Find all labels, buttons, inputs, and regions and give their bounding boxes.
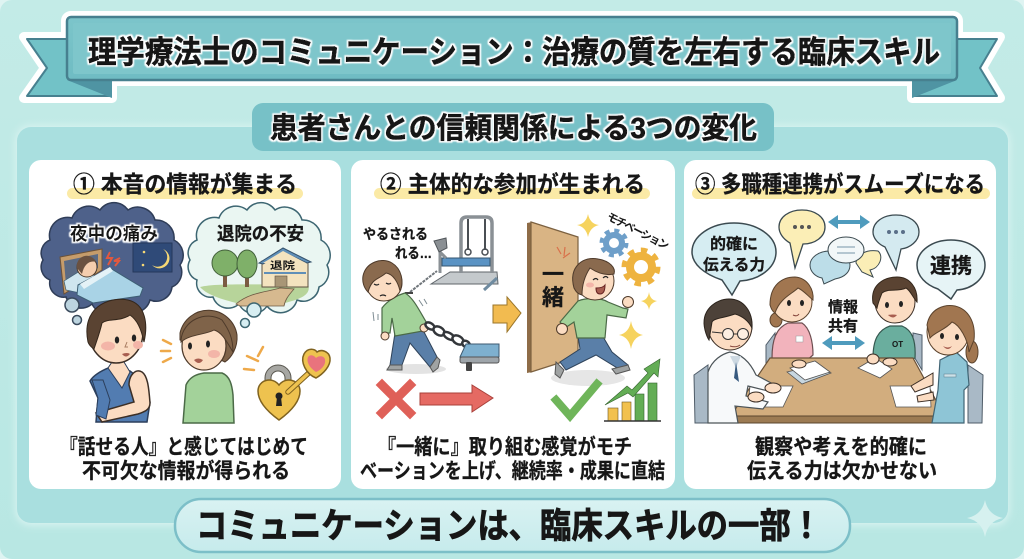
card 2 caption: 『一緒に』取り組む感覚がモチ [378, 435, 632, 459]
door with "together": 一 [542, 262, 564, 287]
card 3 caption [747, 436, 937, 483]
card 3 heading: ③ 多職種連携がスムーズになる [695, 171, 985, 197]
papers on table [748, 358, 931, 407]
title ribbon [24, 16, 1000, 98]
card 1 caption: 『話せる人』と感じてはじめて [60, 435, 308, 459]
card 3 caption: 伝える力は欠かせない [747, 459, 937, 483]
card 2 heading: ② 主体的な参加が生まれる [380, 171, 645, 197]
OT therapist in green [873, 277, 917, 362]
thought bubble: discharge anxiety [188, 203, 330, 313]
speech bubble: collaboration [917, 240, 985, 299]
"reluctant" label [363, 226, 432, 261]
inner panel glow [16, 126, 1009, 525]
footer text: コミュニケーションは、臨床スキルの一部！ [196, 507, 822, 546]
subtitle pill [252, 103, 774, 151]
growth chart [604, 359, 661, 421]
overlapping bubbles [810, 237, 881, 284]
icon: check mark [556, 384, 597, 416]
therapist in blue scrubs [87, 299, 150, 422]
info share label: 情報 [828, 298, 858, 316]
exercise machine [405, 217, 498, 293]
arrow: top double [828, 215, 870, 229]
sparkles [577, 214, 657, 349]
table [730, 358, 945, 423]
card 2 caption [360, 435, 665, 483]
speech bubble: yellow dots [779, 210, 825, 268]
panel: card 3 [684, 160, 996, 489]
speech bubble: communication ability [692, 223, 776, 295]
card 3 caption: 観察や考えを的確に [755, 436, 927, 459]
card 3 heading highlight [692, 188, 990, 199]
icon: decorative sparkle [967, 500, 1003, 537]
thought bubble: discharge anxiety: 退院の不安 [217, 224, 304, 244]
inner content panel [17, 127, 1008, 523]
subtitle text: 患者さんとの信頼関係による3つの変化 [270, 112, 757, 145]
thought dots: night pain [65, 298, 82, 324]
woman in blue polo [911, 306, 978, 423]
door with "together": 緒 [542, 285, 564, 310]
arrow: orange [493, 297, 521, 332]
arrow: info share [822, 336, 865, 350]
info share label: 共有 [828, 318, 858, 335]
thought bubble: night pain: 夜中の痛み [70, 224, 158, 244]
panel: card 2 [351, 160, 675, 489]
thought bubble: discharge anxiety: 退院 [270, 259, 295, 272]
reluctant patient [363, 261, 446, 374]
card 2 heading highlight [374, 188, 650, 199]
"reluctant" label: れる… [395, 245, 432, 261]
emphasis marks [161, 340, 263, 370]
chairs [694, 333, 983, 423]
speech bubble: communication ability: 伝える力 [703, 256, 765, 274]
icon: heart lock and key [258, 349, 330, 420]
door with "together" [527, 222, 578, 373]
speech bubble: communication ability: 的確に [710, 234, 758, 253]
footer pill [175, 499, 850, 552]
nurse in pink [770, 277, 813, 362]
"reluctant" label: やるされる [363, 226, 428, 242]
arrow: red [420, 385, 493, 412]
weight cart [460, 344, 499, 371]
card 1 heading: ① 本音の情報が集まる [73, 171, 297, 197]
speech bubble: collaboration: 連携 [930, 255, 972, 278]
OT therapist in green: OT [892, 340, 903, 349]
thought bubble: night pain [41, 203, 183, 313]
doctor in white coat [704, 299, 781, 423]
motivated patient running [551, 258, 634, 386]
panel: card 1 [29, 160, 341, 489]
card 1 caption: 不可欠な情報が得られる [82, 459, 290, 483]
thought dots: discharge anxiety [240, 303, 261, 328]
speech bubble: blue dots [873, 215, 919, 270]
title text: 理学療法士のコミュニケーション：治療の質を左右する臨床スキル [88, 35, 940, 70]
gears [602, 230, 658, 284]
motivation label: モチベーション [605, 210, 671, 253]
card 1 heading highlight [67, 188, 303, 199]
card 1 caption [60, 435, 308, 483]
info share label [828, 298, 858, 335]
card 2 caption: ベーションを上げ、継続率・成果に直結 [360, 459, 665, 483]
icon: red cross [382, 385, 410, 413]
patient in green shirt [180, 310, 237, 423]
chain [424, 321, 471, 349]
hands of nurse and OT [792, 354, 897, 368]
